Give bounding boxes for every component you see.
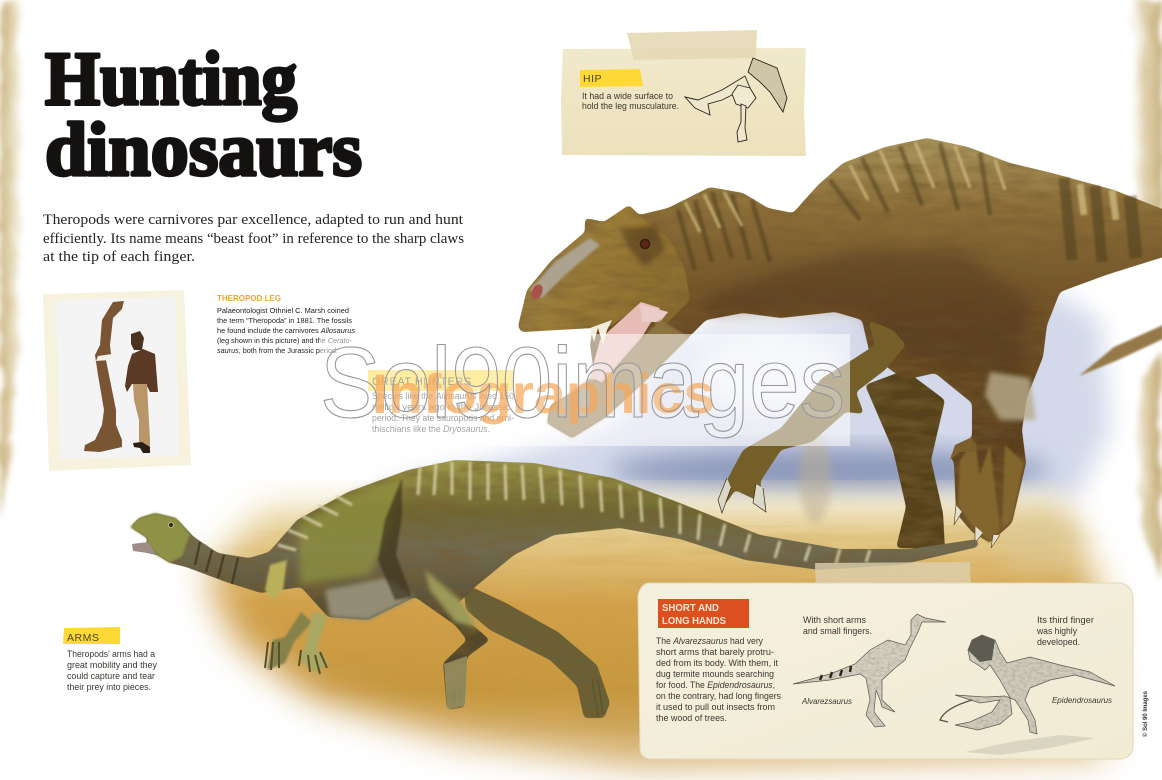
tail bands bbox=[820, 666, 851, 680]
caption: short arms: With short arms bbox=[803, 615, 866, 625]
head shadow bbox=[968, 635, 995, 662]
icon: hip bone sketch bbox=[685, 58, 787, 142]
caption: third finger: developed. bbox=[1037, 637, 1080, 647]
back ridges bbox=[278, 462, 870, 563]
body and tail bbox=[130, 460, 978, 710]
note: great hunters: million years ago in the Jurassic bbox=[372, 402, 511, 412]
body bbox=[955, 635, 1115, 734]
intro paragraph: at the tip of each finger. bbox=[43, 249, 195, 265]
caption: third finger: was highly bbox=[1036, 626, 1077, 636]
watermark bbox=[320, 327, 850, 446]
panel body text: dug termite mounds searching bbox=[656, 669, 774, 679]
heading: SHORT AND bbox=[662, 602, 719, 614]
man shoes bbox=[133, 442, 150, 453]
mouth bbox=[132, 542, 156, 554]
chest shadow bbox=[700, 250, 1030, 380]
intro paragraph bbox=[43, 212, 464, 265]
panel body text: for food. The Epidendrosaurus, bbox=[656, 680, 775, 690]
red label bbox=[658, 599, 749, 628]
sketch: Epidendrosaurus bbox=[940, 635, 1115, 755]
label: Epidendrosaurus: Epidendrosaurus bbox=[1052, 696, 1112, 705]
long finger bbox=[940, 700, 972, 722]
intro paragraph: Theropods were carnivores par excellence, adapted to run and hunt bbox=[43, 212, 463, 228]
note text: Species like the Allosaurus lived 150 bbox=[372, 391, 514, 401]
caption: third finger bbox=[1036, 615, 1094, 647]
note: hip: hold the leg musculature. bbox=[582, 101, 679, 111]
hand front bbox=[265, 642, 327, 674]
far hind leg bbox=[463, 583, 610, 718]
title: dinosaurs bbox=[45, 108, 362, 192]
sky background bbox=[360, 290, 1110, 500]
neck stripes bbox=[195, 542, 238, 584]
thigh light bbox=[425, 570, 478, 628]
dinosaur: Dryosaurus prey bbox=[130, 460, 978, 718]
nostril bbox=[529, 283, 545, 301]
note: arms bbox=[63, 627, 158, 692]
text: theropod leg: (leg shown in this picture) and the Cerato- bbox=[217, 336, 352, 345]
brow shadow bbox=[620, 225, 665, 265]
brow and snout highlight bbox=[530, 238, 600, 298]
heading: LONG HANDS bbox=[662, 615, 726, 627]
foot claws bbox=[954, 505, 1000, 548]
tape bbox=[627, 30, 757, 60]
caption: third finger: Its third finger bbox=[1037, 615, 1094, 625]
dinosaur: Allosaurus bbox=[518, 138, 1162, 549]
panel body text: The Alvarezsaurus had very bbox=[656, 636, 763, 646]
man head bbox=[131, 331, 144, 350]
label: Alvarezsaurus: Alvarezsaurus bbox=[801, 697, 852, 706]
text: theropod leg: the term “Theropoda” in 1881. The fossils bbox=[217, 316, 352, 325]
tape on the lower panel bbox=[815, 562, 971, 592]
shoulder lobe bbox=[265, 560, 287, 600]
text: theropod leg: THEROPOD LEG bbox=[217, 293, 281, 303]
text: theropod leg: Palaeontologist Othniel C. Marsh coined bbox=[217, 306, 349, 315]
upper hip highlight bbox=[298, 478, 405, 585]
text: theropod leg: saurus, both from the Jurassic period. bbox=[217, 346, 338, 355]
head colouring bbox=[518, 205, 690, 332]
near arm lower bbox=[299, 612, 328, 673]
man jacket bbox=[125, 349, 158, 392]
note text: Theropods’ arms had a bbox=[67, 649, 155, 659]
photo inner bbox=[56, 297, 179, 459]
panel body text bbox=[656, 636, 781, 723]
watermark outlined word: Sol90images bbox=[320, 327, 845, 439]
label text: HIP bbox=[583, 73, 602, 85]
credit: © Sol 90 Images bbox=[1142, 690, 1149, 737]
lower jaw bbox=[547, 320, 689, 438]
panel body text: the wood of trees. bbox=[656, 713, 727, 723]
foot toes bbox=[958, 440, 1024, 543]
paper bbox=[561, 48, 806, 156]
sketch: Alvarezsaurus bbox=[793, 614, 946, 727]
heading bbox=[662, 602, 726, 627]
watermark orange word: Infographics bbox=[372, 362, 715, 425]
far leg bbox=[865, 370, 945, 549]
fossil leg bbox=[84, 301, 124, 452]
fossil joint bbox=[96, 354, 112, 361]
panel: short and long hands bbox=[638, 583, 1133, 759]
text: theropod leg: he found include the carnivores Allosaurus bbox=[217, 326, 355, 335]
back stripes bbox=[678, 143, 1136, 270]
arm claws bbox=[718, 478, 766, 513]
photo frame bbox=[43, 290, 191, 471]
man legs bbox=[133, 384, 150, 448]
note: hip bbox=[561, 30, 806, 156]
caption: short arms: and small fingers. bbox=[803, 626, 872, 636]
body bbox=[793, 614, 946, 727]
label bbox=[63, 627, 120, 644]
far arm bbox=[267, 612, 312, 670]
intro paragraph: efficiently. Its name means “beast foot” in reference to the sharp claws bbox=[43, 231, 464, 247]
eye bbox=[640, 240, 650, 248]
note: arms: great mobility and they bbox=[67, 660, 158, 670]
panel body text: it used to pull out insects from bbox=[656, 702, 775, 712]
head colouring bbox=[130, 513, 190, 563]
note: great hunters bbox=[368, 370, 514, 434]
near arm bbox=[722, 320, 906, 514]
caption: short arms bbox=[803, 615, 872, 636]
aged paper edge left bbox=[0, 0, 24, 520]
panel body text: on the contrary, had long fingers bbox=[656, 691, 781, 701]
shoulder dark fold bbox=[378, 478, 412, 600]
ground scrub bbox=[965, 735, 1095, 755]
body and head bbox=[518, 138, 1162, 543]
panel body text: ded from its body. With them, it bbox=[656, 658, 778, 668]
eye bbox=[168, 522, 174, 528]
watermark band bbox=[320, 334, 850, 446]
tongue bbox=[640, 304, 668, 322]
note: great hunters: period. They ate sauropods and orni- bbox=[372, 413, 514, 423]
text: theropod leg bbox=[217, 293, 355, 355]
aged paper edge right bbox=[1130, 0, 1162, 580]
desert ground bbox=[150, 480, 1150, 780]
note text: It had a wide surface to bbox=[582, 91, 673, 101]
paper bbox=[638, 583, 1133, 759]
note: arms: their prey into pieces. bbox=[67, 682, 151, 692]
title bbox=[45, 37, 362, 192]
back highlights bbox=[685, 142, 1116, 232]
label bbox=[580, 69, 643, 87]
rear toe bbox=[950, 437, 975, 460]
tail tip bbox=[1079, 325, 1162, 376]
panel body text: short arms that barely protru- bbox=[656, 647, 774, 657]
open mouth bbox=[590, 302, 660, 383]
note: great hunters: thischians like the Dryosaurus. bbox=[372, 424, 490, 434]
label text: ARMS bbox=[67, 632, 99, 644]
title: Hunting bbox=[45, 37, 297, 121]
belly bbox=[325, 578, 415, 620]
photo: leg fossil and man bbox=[43, 290, 191, 471]
teeth bbox=[590, 320, 612, 345]
dust behind the feet bbox=[799, 432, 1082, 572]
hind foot toes bbox=[449, 664, 603, 716]
pale hind foot bbox=[444, 656, 467, 710]
yellow label bbox=[368, 370, 514, 391]
thigh wrinkle patch bbox=[985, 372, 1036, 420]
note: arms: could capture and tear bbox=[67, 671, 155, 681]
label text: GREAT HUNTERS bbox=[372, 376, 472, 388]
